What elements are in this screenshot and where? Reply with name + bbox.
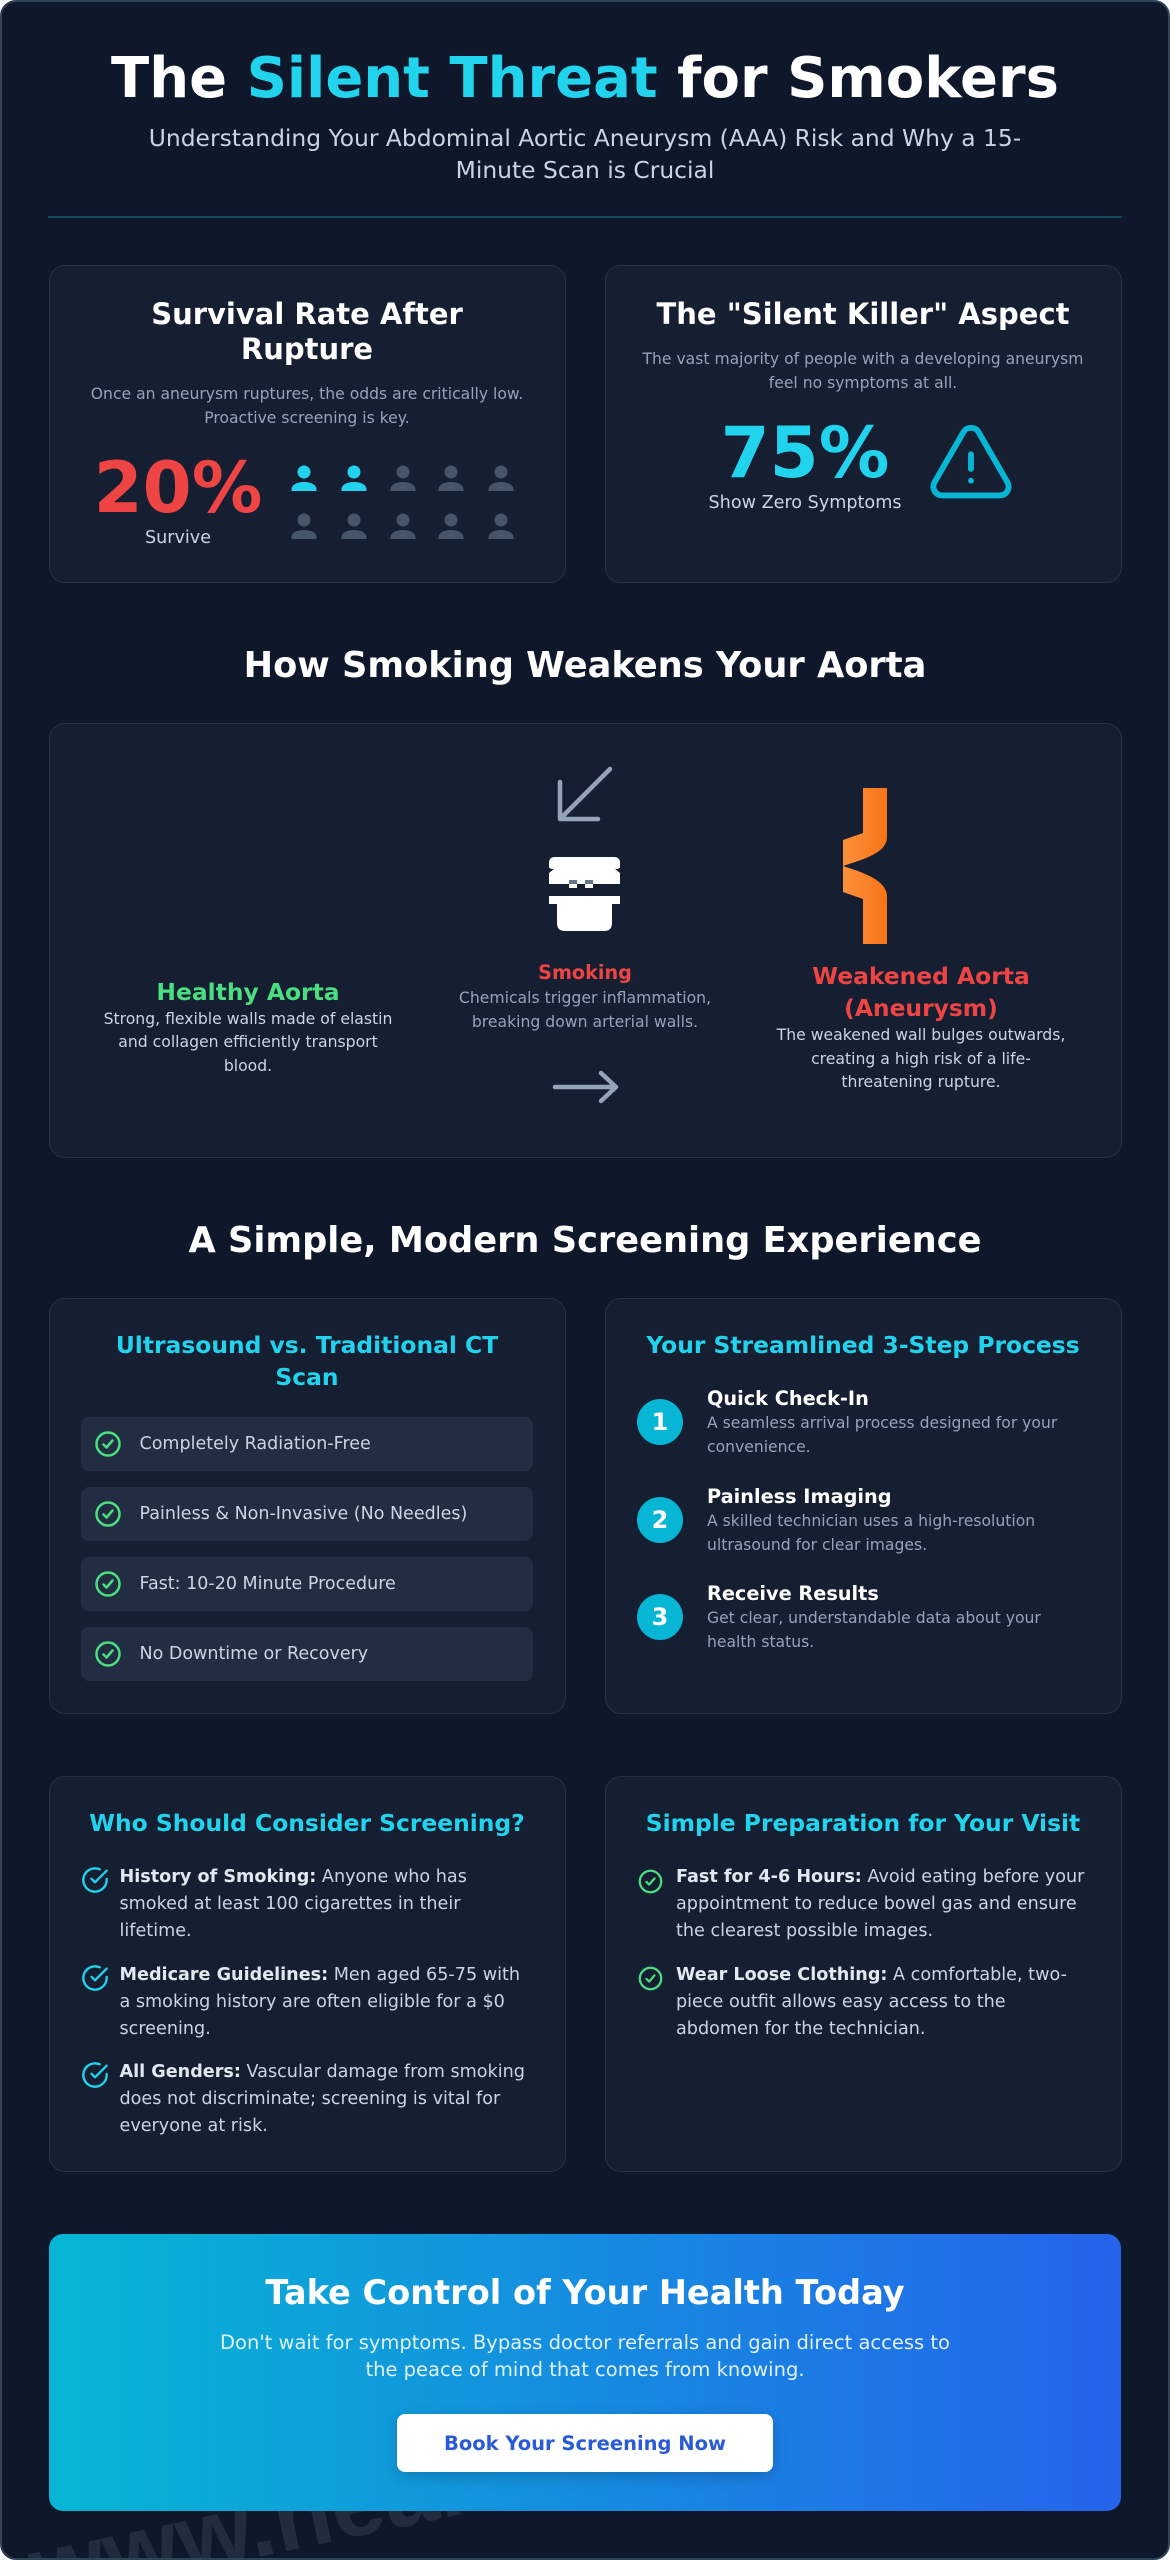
text: medicare guidelines: Medicare Guidelines: Men aged 65-75 with — [120, 1964, 520, 1984]
heading: screening experience: A Simple, Modern Screening Experience — [189, 1220, 981, 1260]
button: book screening — [397, 2414, 773, 2472]
text: smoking description — [459, 988, 711, 1031]
stat: 75 percent: 75% — [721, 412, 889, 494]
panel: who should consider — [48, 1776, 566, 2172]
heading: survival rate: Rupture — [241, 332, 373, 366]
text: healthy aorta description: blood. — [224, 1056, 272, 1075]
step 3 number — [637, 1594, 683, 1640]
step 2 text: A skilled technician uses a high-resolution — [707, 1512, 1035, 1530]
text: call to action description: Don't wait for symptoms. Bypass doctor referrals and gain direct access to — [220, 2330, 950, 2354]
step 2 text: Painless Imaging — [707, 1485, 892, 1508]
text: history of smoking: lifetime. — [120, 1921, 192, 1941]
heading: healthy aorta: Healthy Aorta — [156, 978, 340, 1006]
icon: weakened aorta bulge — [843, 788, 887, 944]
text: medicare guidelines: screening. — [120, 2019, 211, 2039]
text: weakened aorta description: creating a high risk of a life- — [811, 1049, 1031, 1068]
heading: preparation: Simple Preparation for Your Visit — [646, 1809, 1080, 1837]
heading: survival rate — [151, 297, 463, 366]
list item: radiation free — [81, 1417, 533, 1471]
icon: green check 1 — [638, 1870, 662, 1894]
button: book screening: Book Your Screening Now — [444, 2432, 726, 2455]
text: history of smoking: History of Smoking: Anyone who has — [120, 1867, 467, 1887]
panel: survival rate — [48, 265, 566, 583]
icon: check 2 — [82, 1965, 108, 1991]
text: wear loose clothing: piece outfit allows easy access to the — [676, 1992, 1006, 2012]
icon: warning triangle — [930, 424, 1012, 498]
text: weakened aorta description: threatening rupture. — [841, 1072, 1001, 1091]
text: silent killer description: feel no symptoms at all. — [769, 374, 957, 392]
text: medicare guidelines — [120, 1964, 520, 2039]
list item: fast — [81, 1557, 533, 1611]
text: all genders: everyone at risk. — [120, 2116, 268, 2136]
text: fast for hours — [676, 1867, 1084, 1941]
heading: who should consider: Who Should Consider Screening? — [89, 1809, 525, 1837]
text: silent killer description — [642, 350, 1083, 392]
step 3 text: Get clear, understandable data about your — [707, 1609, 1041, 1627]
icon: check 1 — [82, 1867, 108, 1893]
text: wear loose clothing: abdomen for the technician. — [676, 2019, 926, 2039]
title: The Silent Threat for Smokers — [111, 46, 1059, 110]
text: weakened aorta description — [776, 1025, 1065, 1091]
step 1 text: Quick Check-In — [707, 1387, 869, 1410]
icon: green check 2 — [638, 1966, 662, 1990]
text: fast for hours: the clearest possible images. — [676, 1921, 933, 1941]
step 1 number: 1 — [652, 1408, 668, 1436]
step 2 number — [637, 1497, 683, 1543]
text: healthy aorta description: Strong, flexible walls made of elastin — [104, 1008, 392, 1028]
step 2 text: ultrasound for clear images. — [707, 1536, 927, 1554]
panel: ultrasound vs ct — [48, 1298, 566, 1714]
step 2 number: 2 — [652, 1506, 668, 1534]
arrow: right — [552, 1070, 618, 1104]
text: medicare guidelines: a smoking history are often eligible for a $0 — [120, 1992, 505, 2012]
text: smoking description: Chemicals trigger inflammation, — [459, 988, 711, 1007]
panel: three step process — [604, 1298, 1122, 1714]
text: healthy aorta description — [104, 1008, 392, 1075]
step 1 text: A seamless arrival process designed for your — [707, 1414, 1057, 1432]
heading: how smoking weakens: How Smoking Weakens Your Aorta — [244, 645, 926, 686]
arrow: down left — [558, 766, 612, 822]
step 3 text — [707, 1582, 1041, 1651]
heading: weakened aorta — [812, 962, 1030, 1022]
text: survival description — [91, 385, 523, 427]
text: fast for hours: Fast for 4-6 Hours: Avoid eating before your — [676, 1867, 1084, 1887]
step 3 number: 3 — [652, 1603, 668, 1631]
text: fast for hours: appointment to reduce bowel gas and ensure — [676, 1894, 1077, 1914]
text: call to action description: the peace of mind that comes from knowing. — [365, 2358, 805, 2380]
panel: aorta diagram — [48, 723, 1122, 1158]
label: show zero symptoms: Show Zero Symptoms — [708, 492, 902, 512]
heading: ultrasound vs ct: Ultrasound vs. Traditional CT — [116, 1331, 498, 1359]
text: call to action description — [220, 2330, 950, 2380]
heading: smoking: Smoking — [538, 960, 632, 984]
step 2 text — [707, 1485, 1035, 1554]
heading: weakened aorta: Weakened Aorta — [812, 962, 1030, 990]
step 3 text: health status. — [707, 1633, 814, 1651]
heading: survival rate: Survival Rate After — [151, 297, 463, 331]
stat: 20 percent: 20% — [94, 447, 262, 529]
list item: fast: Fast: 10-20 Minute Procedure — [140, 1574, 396, 1594]
text: all genders — [120, 2062, 525, 2136]
heading: three step process: Your Streamlined 3-Step Process — [646, 1331, 1080, 1359]
step 1 number — [637, 1399, 683, 1445]
text: survival description: Proactive screening is key. — [204, 409, 410, 427]
heading: ultrasound vs ct: Scan — [275, 1363, 339, 1391]
heading: ultrasound vs ct — [116, 1331, 498, 1391]
pictogram: 2 of 10 people — [292, 466, 514, 539]
heading: silent killer: The "Silent Killer" Aspect — [656, 297, 1070, 331]
step 1 text — [707, 1387, 1058, 1456]
list item: painless: Painless & Non-Invasive (No Needles) — [140, 1504, 467, 1524]
text: history of smoking: smoked at least 100 cigarettes in their — [120, 1894, 460, 1914]
text: survival description: Once an aneurysm ruptures, the odds are critically low. — [91, 385, 523, 403]
heading: weakened aorta: (Aneurysm) — [844, 994, 998, 1022]
text: wear loose clothing — [676, 1964, 1067, 2039]
text: wear loose clothing: Wear Loose Clothing: A comfortable, two- — [676, 1964, 1067, 1984]
list item: no downtime: No Downtime or Recovery — [140, 1644, 368, 1664]
heading: call to action: Take Control of Your Health Today — [265, 2273, 905, 2312]
text: all genders: All Genders: Vascular damage from smoking — [120, 2062, 525, 2082]
list item: radiation free: Completely Radiation-Free — [140, 1434, 371, 1454]
text: weakened aorta description: The weakened wall bulges outwards, — [777, 1025, 1065, 1044]
list item: painless — [81, 1487, 533, 1541]
text: smoking description: breaking down arterial walls. — [472, 1012, 698, 1031]
subtitle: Understanding Your Abdominal Aortic Aneurysm (AAA) Risk and Why a 15- — [149, 124, 1021, 152]
panel: silent killer — [604, 265, 1122, 583]
label: survive: Survive — [145, 528, 211, 548]
text: all genders: does not discriminate; screening is vital for — [120, 2089, 500, 2109]
subtitle: Minute Scan is Crucial — [456, 156, 714, 184]
step 1 text: convenience. — [707, 1438, 811, 1456]
panel: call to action — [49, 2234, 1121, 2511]
subtitle — [149, 124, 1021, 184]
text: history of smoking — [120, 1867, 467, 1941]
step 3 text: Receive Results — [707, 1582, 879, 1605]
icon: check 3 — [82, 2062, 108, 2088]
panel: preparation — [604, 1776, 1122, 2172]
text: silent killer description: The vast majority of people with a developing aneurysm — [642, 350, 1083, 368]
list item: no downtime — [81, 1627, 533, 1681]
icon: cigarette filter — [549, 857, 620, 931]
text: healthy aorta description: and collagen efficiently transport — [118, 1032, 378, 1051]
